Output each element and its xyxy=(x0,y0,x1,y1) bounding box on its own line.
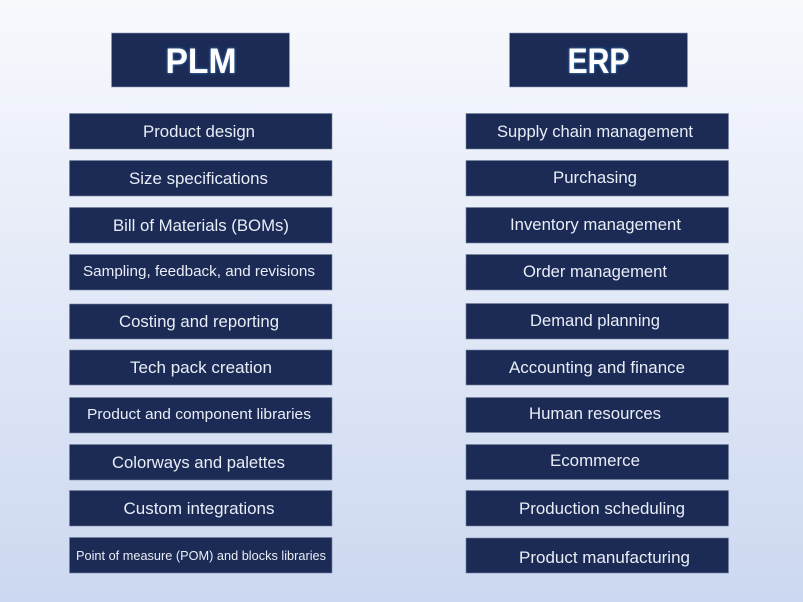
item: Demand planning: Demand planning xyxy=(530,312,660,330)
item: Purchasing xyxy=(466,160,728,196)
heading: PLM xyxy=(112,33,290,87)
item: Colorways and palettes xyxy=(70,444,332,480)
item: Inventory management: Inventory management xyxy=(510,216,681,234)
item: Human resources xyxy=(466,398,728,432)
heading: ERP xyxy=(510,33,688,87)
item: Sampling, feedback, and revisions xyxy=(70,254,332,290)
item: Sampling, feedback, and revisions: Sampling, feedback, and revisions xyxy=(83,263,315,280)
item: Point of measure and blocks libraries xyxy=(70,538,332,573)
item: Bill of Materials: Bill of Materials (BOMs) xyxy=(113,217,289,235)
heading: ERP: ERP xyxy=(568,42,630,81)
item: Accounting and finance: Accounting and finance xyxy=(509,359,685,377)
item: Costing and reporting: Costing and reporting xyxy=(119,313,279,331)
item: Product and component libraries: Product and component libraries xyxy=(87,406,311,423)
item: Product manufacturing: Product manufacturing xyxy=(519,549,690,567)
item: Purchasing: Purchasing xyxy=(553,169,637,187)
item: Tech pack creation: Tech pack creation xyxy=(130,359,272,377)
item: Bill of Materials xyxy=(70,208,332,243)
item: Product and component libraries xyxy=(70,398,332,433)
item: Ecommerce xyxy=(466,444,728,480)
panel: PLM column xyxy=(70,33,332,573)
item: Supply chain management: Supply chain management xyxy=(497,123,693,141)
item: Custom integrations: Custom integrations xyxy=(124,500,274,518)
item: Demand planning xyxy=(466,304,728,339)
item: Custom integrations xyxy=(70,490,332,526)
item: Product design: Product design xyxy=(143,123,255,141)
item: Ecommerce: Ecommerce xyxy=(550,452,640,470)
item: Order management xyxy=(466,254,728,290)
item: Point of measure and blocks libraries: Point of measure (POM) and blocks libraries xyxy=(76,548,326,563)
item: Inventory management xyxy=(466,208,728,243)
item: Accounting and finance xyxy=(466,350,728,385)
item: Tech pack creation xyxy=(70,350,332,385)
item: Production scheduling: Production scheduling xyxy=(519,500,685,518)
item: Product manufacturing xyxy=(466,538,728,573)
item: Costing and reporting xyxy=(70,304,332,339)
item: Product design xyxy=(70,114,332,149)
item: Human resources: Human resources xyxy=(529,405,661,423)
item: Production scheduling xyxy=(466,490,728,526)
item: Size specifications: Size specifications xyxy=(129,170,268,188)
item: Colorways and palettes: Colorways and palettes xyxy=(112,454,285,472)
heading: PLM: PLM xyxy=(166,42,236,81)
item: Size specifications xyxy=(70,160,332,196)
item: Order management: Order management xyxy=(523,263,667,281)
panel: ERP column xyxy=(466,33,728,573)
item: Supply chain management xyxy=(466,114,728,149)
